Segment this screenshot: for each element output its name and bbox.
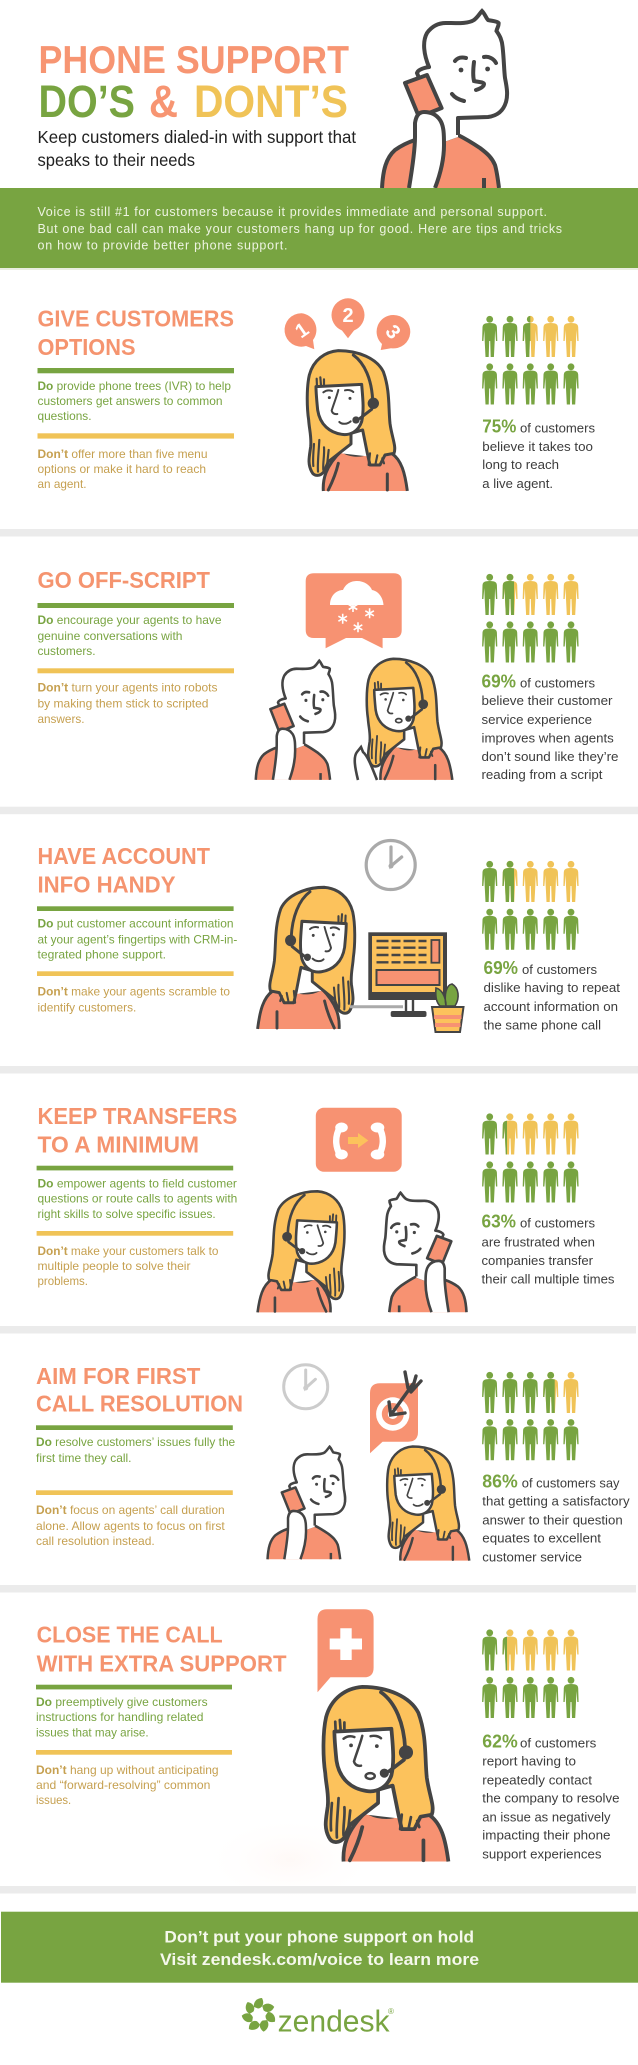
- statistic: long to reach: [482, 457, 559, 472]
- do text: tegrated phone support.: [38, 947, 166, 961]
- heading: TO A MINIMUM: [38, 1132, 199, 1158]
- subtitle: speaks to their needs: [38, 150, 195, 170]
- dont text: Don’t hang up without anticipating: [36, 1763, 219, 1777]
- icon: phone transfer: [316, 1108, 402, 1172]
- do text: Do preemptively give customers: [36, 1695, 208, 1709]
- heading: GIVE CUSTOMERS: [38, 306, 234, 332]
- panel: aim for first call resolution: [36, 1363, 630, 1564]
- statistic: 75%: [482, 416, 516, 436]
- statistic: their call multiple times: [482, 1271, 615, 1286]
- panel: go off-script: [38, 567, 618, 782]
- statistic: [482, 1212, 615, 1286]
- statistic: [482, 416, 595, 491]
- statistic: equates to excellent: [482, 1531, 601, 1546]
- illustration: customer: [384, 1193, 466, 1312]
- intro banner: [0, 188, 638, 270]
- statistic: report having to: [482, 1754, 576, 1769]
- heading: INFO HANDY: [38, 872, 176, 898]
- dont text: Don’t focus on agents’ call duration: [36, 1503, 225, 1517]
- statistic: 63%: [482, 1212, 516, 1232]
- heading: HAVE ACCOUNT: [38, 843, 211, 869]
- panel: close the call with extra support: [36, 1609, 620, 1905]
- dont text: [38, 681, 218, 726]
- statistic: of customers: [520, 675, 595, 690]
- statistic: repeatedly contact: [482, 1772, 592, 1787]
- icon: clock: [366, 840, 415, 890]
- do text: instructions for handling related: [36, 1710, 204, 1724]
- zendesk logo: [241, 1998, 394, 2039]
- panel: have account info handy: [37, 840, 620, 1032]
- dont text: alone. Allow agents to focus on first: [36, 1519, 225, 1533]
- statistic: 86%: [482, 1472, 518, 1492]
- heading: CLOSE THE CALL: [37, 1622, 223, 1648]
- statistic: are frustrated when: [482, 1235, 595, 1250]
- illustration: agent hand: [355, 747, 377, 780]
- do text: issues that may arise.: [36, 1726, 149, 1740]
- dont text: answers.: [38, 712, 84, 726]
- dont text: [38, 1244, 219, 1288]
- heading: KEEP TRANSFERS: [38, 1103, 237, 1129]
- illustration: agent: [258, 1191, 344, 1312]
- soft glow: [200, 1815, 380, 1905]
- statistic: [482, 671, 618, 782]
- subtitle: Keep customers dialed-in with support that: [38, 127, 356, 147]
- do text: at your agent’s fingertips with CRM-in-: [38, 932, 237, 946]
- do text: [36, 1435, 236, 1465]
- title: [38, 39, 349, 127]
- do text: [38, 613, 222, 658]
- zendesk logo: ®: [388, 2007, 394, 2016]
- statistic: of customers: [520, 1736, 597, 1751]
- do text: Do encourage your agents to have: [38, 613, 222, 627]
- statistic: [484, 958, 620, 1032]
- heading: [37, 1622, 287, 1677]
- do text: questions or route calls to agents with: [38, 1191, 237, 1205]
- zendesk logo: zendesk: [278, 2004, 390, 2039]
- statistic: impacting their phone: [482, 1827, 610, 1842]
- do text: [38, 916, 237, 961]
- statistic: answer to their question: [482, 1512, 623, 1527]
- statistic: [482, 1472, 630, 1564]
- dont text: an agent.: [38, 477, 86, 491]
- statistic: of customers: [520, 420, 595, 435]
- icon: speech bubble with cloud: [306, 573, 402, 648]
- do text: questions.: [38, 409, 92, 423]
- statistic: believe it takes too: [482, 439, 593, 454]
- call to action banner: Visit zendesk.com/voice to learn more: [160, 1950, 479, 1969]
- title: PHONE SUPPORT: [38, 39, 349, 82]
- icon: numbered bubbles: [285, 298, 410, 350]
- icon: clock: [284, 1365, 328, 1409]
- dont text: [36, 1763, 219, 1807]
- dont text: Don’t make your agents scramble to: [38, 984, 230, 998]
- dont text: Don’t offer more than five menu: [38, 447, 208, 461]
- statistic: account information on: [484, 999, 618, 1014]
- illustration: customer: [256, 661, 335, 780]
- heading: [38, 306, 234, 360]
- heading: [38, 843, 211, 898]
- heading: CALL RESOLUTION: [36, 1391, 243, 1417]
- dont text: [38, 447, 208, 491]
- pictogram: [482, 574, 579, 662]
- do text: Do provide phone trees (IVR) to help: [38, 379, 231, 393]
- intro banner: Voice is still #1 for customers because it provides immediate and personal support.: [38, 205, 547, 219]
- statistic: companies transfer: [482, 1253, 594, 1268]
- pictogram: [482, 1113, 579, 1202]
- statistic: that getting a satisfactory: [482, 1494, 630, 1509]
- call to action banner: Don’t put your phone support on hold: [164, 1928, 474, 1947]
- statistic: 69%: [484, 958, 518, 978]
- pictogram: [482, 316, 579, 404]
- statistic: support experiences: [482, 1846, 602, 1861]
- dont text: issues.: [36, 1793, 71, 1807]
- title: &: [149, 76, 178, 127]
- panel: give customers options: [38, 298, 595, 491]
- do text: customers get answers to common: [38, 394, 222, 408]
- heading: [38, 1103, 237, 1158]
- statistic: of customers: [522, 962, 597, 977]
- illustration: customer: [268, 1447, 345, 1559]
- dont text: by making them stick to scripted: [38, 697, 208, 711]
- dont text: and “forward-resolving” common: [36, 1778, 210, 1792]
- title: DONT’S: [194, 76, 348, 127]
- heading: AIM FOR FIRST: [36, 1363, 201, 1389]
- illustration: agent: [367, 659, 452, 780]
- do text: [36, 1695, 208, 1740]
- do text: Do put customer account information: [38, 916, 234, 930]
- title: DO’S: [38, 76, 135, 127]
- statistic: [482, 1732, 620, 1861]
- icon: monitor: [350, 932, 447, 1017]
- statistic: 69%: [482, 671, 516, 691]
- statistic: customer service: [482, 1549, 582, 1564]
- illustration: agent: [258, 887, 355, 1029]
- do text: first time they call.: [36, 1451, 132, 1465]
- dont text: options or make it hard to reach: [38, 462, 206, 476]
- icon: target bubble: [370, 1372, 421, 1453]
- illustration: agent: [307, 351, 407, 491]
- heading: GO OFF-SCRIPT: [38, 567, 211, 593]
- pictogram: [482, 861, 579, 950]
- do text: [38, 1176, 237, 1221]
- heading: [36, 1363, 243, 1417]
- subtitle: [38, 127, 356, 170]
- statistic: of customers say: [522, 1476, 620, 1491]
- heading: OPTIONS: [38, 334, 136, 360]
- statistic: an issue as negatively: [482, 1809, 611, 1824]
- intro banner: on how to provide better phone support.: [38, 238, 288, 252]
- do text: genuine conversations with: [38, 629, 182, 643]
- panel: keep transfers to a minimum: [37, 1103, 615, 1312]
- dont text: problems.: [38, 1274, 88, 1288]
- illustration: agent: [387, 1447, 469, 1561]
- statistic: improves when agents: [482, 730, 614, 745]
- dont text: [38, 984, 230, 1014]
- dont text: [36, 1503, 225, 1548]
- pictogram: [482, 1629, 579, 1718]
- dont text: multiple people to solve their: [38, 1259, 190, 1273]
- statistic: reading from a script: [482, 767, 603, 782]
- call to action banner: [1, 1912, 638, 1983]
- icon: plus bubble: [318, 1609, 374, 1692]
- statistic: a live agent.: [482, 476, 553, 491]
- icon: numbered bubbles: 3: [381, 321, 405, 344]
- illustration: agent: [323, 1687, 448, 1862]
- icon: plant: [432, 984, 464, 1032]
- statistic: of customers: [520, 1216, 595, 1231]
- statistic: 62%: [482, 1732, 518, 1752]
- statistic: the same phone call: [484, 1017, 601, 1032]
- dont text: Don’t turn your agents into robots: [38, 681, 218, 695]
- statistic: service experience: [482, 712, 592, 727]
- icon: numbered bubbles: 1: [291, 319, 313, 343]
- do text: [38, 379, 231, 423]
- icon: numbered bubbles: 2: [342, 305, 354, 327]
- do text: Do empower agents to field customer: [38, 1176, 237, 1190]
- do text: customers.: [38, 644, 96, 658]
- dont text: Don’t make your customers talk to: [38, 1244, 219, 1258]
- dont text: identify customers.: [38, 1000, 136, 1014]
- statistic: don’t sound like they’re: [482, 749, 618, 764]
- pictogram: [482, 1372, 579, 1460]
- dont text: call resolution instead.: [36, 1534, 155, 1548]
- intro banner: But one bad call can make your customers hang up for good. Here are tips and tricks: [38, 222, 562, 236]
- statistic: the company to resolve: [482, 1791, 620, 1806]
- do text: right skills to solve specific issues.: [38, 1207, 216, 1221]
- statistic: dislike having to repeat: [484, 980, 620, 995]
- illustration: man on the phone: [382, 11, 507, 188]
- do text: Do resolve customers’ issues fully the: [36, 1435, 236, 1449]
- statistic: believe their customer: [482, 693, 613, 708]
- heading: WITH EXTRA SUPPORT: [37, 1651, 287, 1677]
